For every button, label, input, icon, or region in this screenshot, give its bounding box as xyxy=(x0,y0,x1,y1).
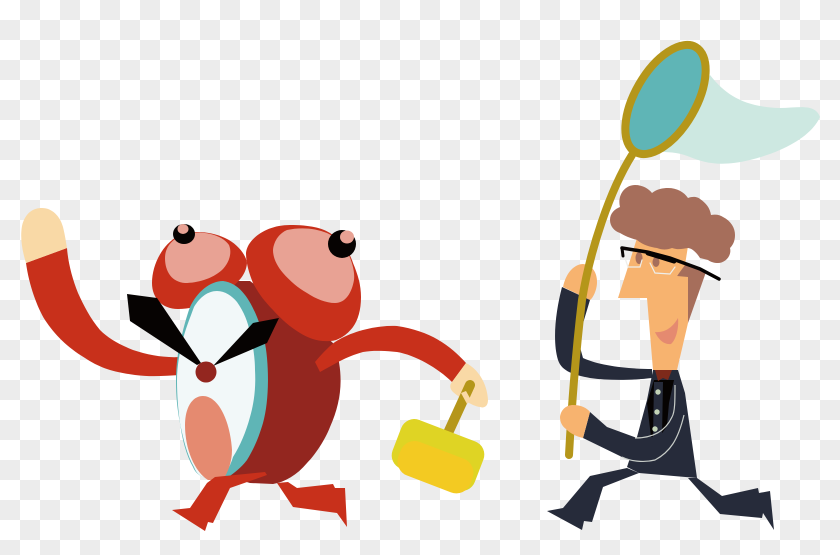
left eye dome xyxy=(152,224,247,309)
clock face xyxy=(177,291,255,478)
left arm xyxy=(26,248,180,376)
character: man with butterfly net xyxy=(547,32,820,530)
jacket seams xyxy=(622,385,684,461)
right dome salmon patch xyxy=(273,228,354,303)
curly hair xyxy=(610,185,735,263)
handbag xyxy=(388,415,488,495)
left dome salmon patch xyxy=(165,232,230,283)
net bag xyxy=(660,75,820,164)
clock hub xyxy=(196,362,216,382)
shirt buttons xyxy=(652,389,661,432)
left pupil highlight xyxy=(178,224,188,234)
man right leg xyxy=(688,478,774,530)
raised arm sleeve xyxy=(555,287,652,380)
shirt front xyxy=(647,380,674,437)
clock right leg xyxy=(277,482,347,527)
glasses xyxy=(622,248,719,279)
character: running alarm clock xyxy=(21,208,488,531)
clock rim xyxy=(176,281,268,478)
left pupil xyxy=(173,224,195,244)
front hand xyxy=(560,405,590,438)
collar tie xyxy=(655,370,672,381)
clock hand left xyxy=(127,294,201,365)
clock left leg xyxy=(172,472,267,531)
right hand xyxy=(450,363,488,407)
handbag inner panel xyxy=(393,437,478,498)
right dome shell xyxy=(246,225,361,341)
salmon belly oval xyxy=(185,396,232,480)
net hoop xyxy=(609,32,722,167)
eyes xyxy=(636,252,660,267)
handbag handle xyxy=(448,385,470,433)
shirt placket xyxy=(653,382,663,437)
man left leg xyxy=(547,468,639,530)
right pupil xyxy=(328,230,356,258)
right arm xyxy=(315,326,466,382)
raised hand xyxy=(563,264,597,300)
clock body xyxy=(205,281,341,484)
right eye dome xyxy=(246,225,361,341)
front arm sleeve xyxy=(583,412,684,462)
left hand xyxy=(21,208,67,263)
face xyxy=(618,238,688,370)
left dome shell xyxy=(152,232,247,309)
right pupil highlight xyxy=(340,230,354,244)
mouth xyxy=(655,318,678,344)
sideburn hair xyxy=(677,262,706,323)
net pole xyxy=(569,155,632,455)
hand thumb xyxy=(461,391,471,404)
clock hand right xyxy=(213,318,279,366)
jacket xyxy=(627,370,697,478)
